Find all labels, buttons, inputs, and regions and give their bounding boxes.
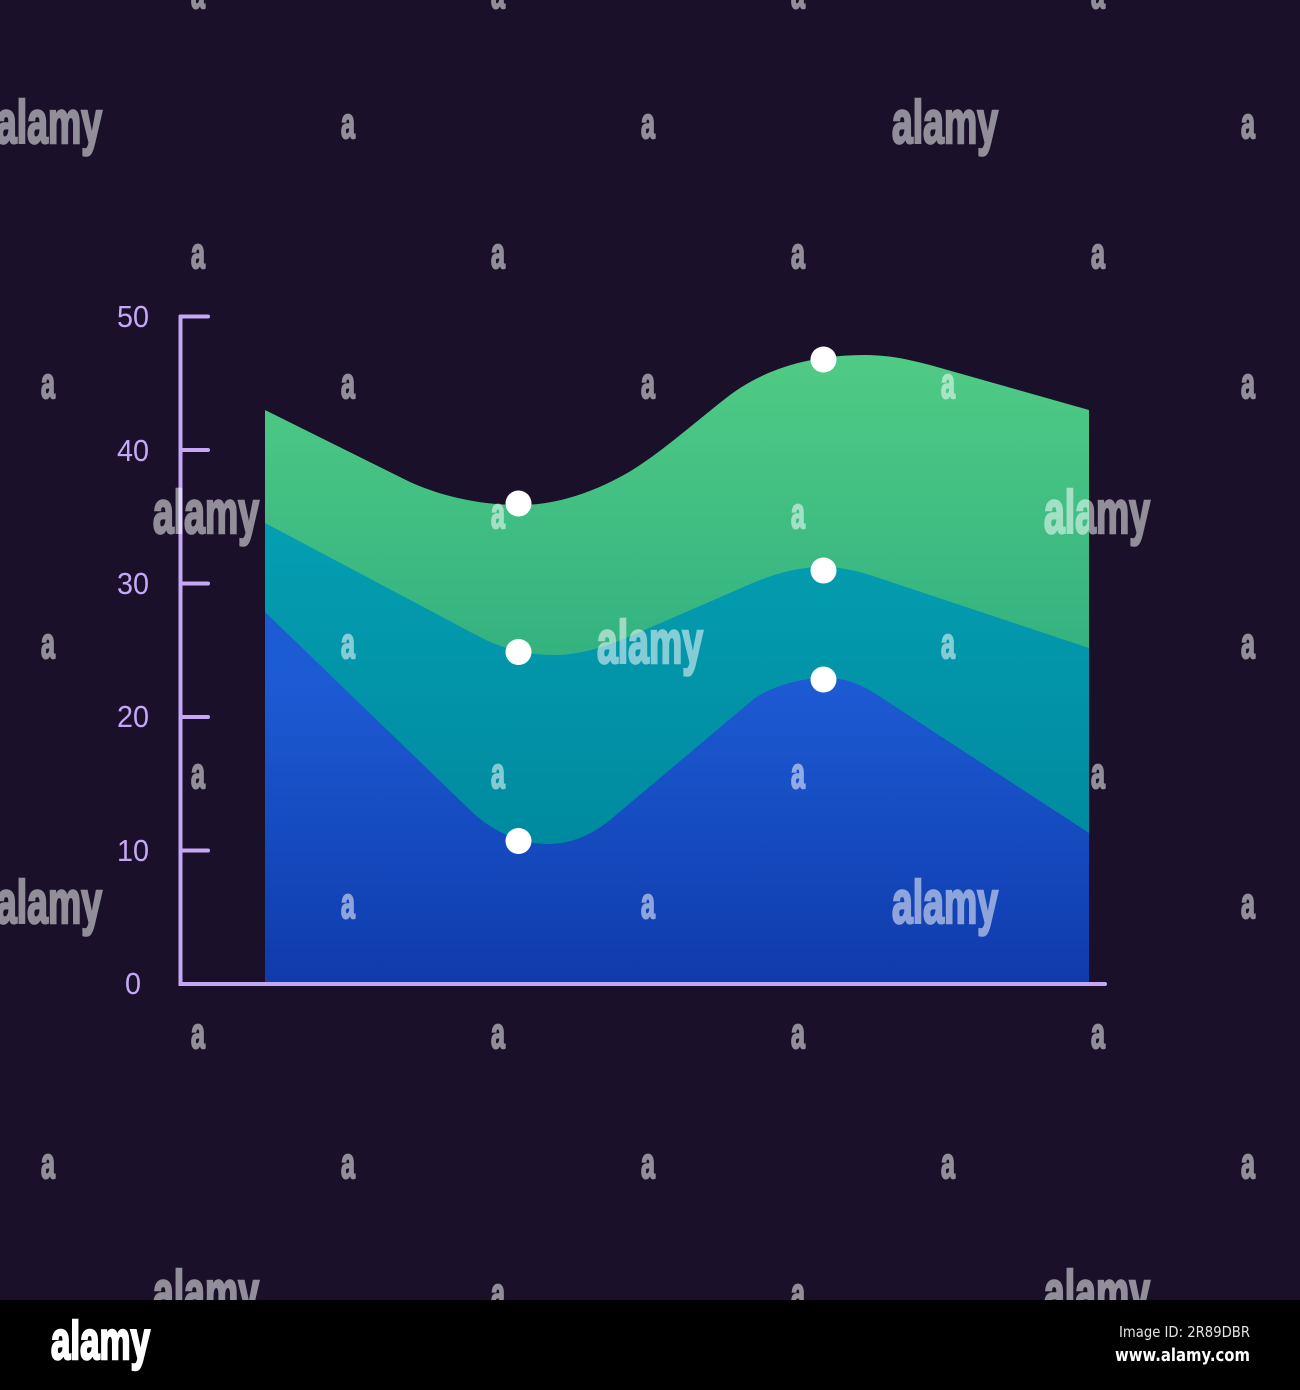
watermark: small marks: aaa — [341, 99, 1256, 148]
watermark: large marks: alamy — [153, 479, 259, 546]
y-axis labels: 30 — [117, 566, 149, 601]
watermark: small marks: aaaaa — [41, 359, 1256, 408]
y-axis labels: 20 — [117, 699, 149, 734]
y-axis labels: 50 — [117, 299, 149, 334]
y-axis labels: 10 — [117, 833, 149, 868]
watermark: small marks: aaaa — [41, 619, 1256, 668]
watermark: large marks: alamy — [153, 1259, 259, 1326]
watermark: large marks: alamy — [597, 609, 703, 676]
footer bar — [0, 1300, 1300, 1390]
website: www.alamy.com — [1115, 1345, 1250, 1366]
watermark: large marks: alamy — [0, 89, 102, 156]
image id: Image ID: 2R89DBR — [1119, 1323, 1250, 1341]
watermark: small marks: aaaa — [191, 749, 1106, 798]
watermark: small marks: aaaa — [191, 229, 1106, 278]
area: teal layer — [265, 523, 1089, 982]
watermark: small marks: aaa — [341, 879, 1256, 928]
watermark: small marks: aaaa — [191, 1009, 1106, 1058]
watermark: large marks — [0, 89, 1150, 1326]
area: green layer — [265, 355, 1089, 982]
watermark: large marks: alamy — [0, 869, 102, 936]
watermark: small marks: aaaaa — [41, 1139, 1256, 1188]
watermark: large marks: alamy — [892, 89, 998, 156]
y-axis labels: 40 — [117, 433, 149, 468]
y-axis labels — [117, 299, 149, 1001]
footer logo: alamy — [51, 1311, 150, 1371]
watermark: large marks: alamy — [1044, 1259, 1150, 1326]
axes — [180, 316, 1105, 984]
area: blue layer — [265, 612, 1089, 982]
data point markers — [506, 346, 836, 854]
watermark: small marks: aa — [491, 489, 806, 538]
watermark: large marks: alamy — [1044, 479, 1150, 546]
area chart — [265, 355, 1089, 982]
y-axis labels: 0 — [125, 966, 141, 1001]
watermark: large marks: alamy — [892, 869, 998, 936]
watermark: small marks: aa — [491, 1269, 806, 1318]
